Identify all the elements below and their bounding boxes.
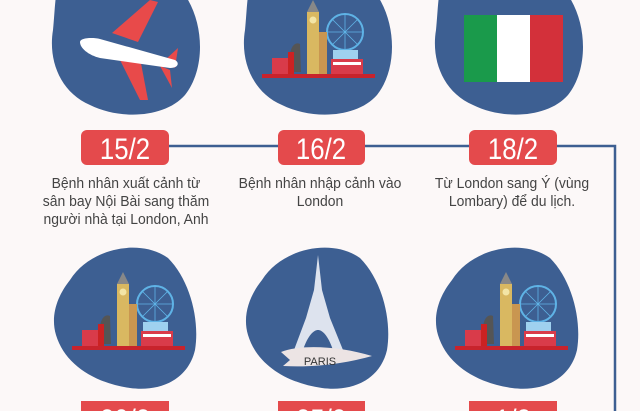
step 4: [54, 248, 196, 411]
date box: step 5: [278, 401, 365, 411]
date box: 18/2: [469, 130, 557, 165]
text: step 1: người nhà tại London, Anh: [44, 212, 208, 228]
text: step 3: Từ London sang Ý (vùng: [435, 175, 589, 192]
text: step 2: London: [297, 194, 343, 210]
icon: italy flag: [464, 15, 563, 82]
date box: 15/2: 15/2: [100, 132, 150, 165]
step 1: 15/2: [43, 0, 209, 228]
icon: eiffel tower: PARIS: [304, 356, 336, 368]
text: step 3: Lombary) để du lịch.: [449, 194, 575, 210]
date box: step 6: [469, 401, 557, 411]
date box: 16/2: [278, 130, 365, 165]
step 2: 16/2: [239, 0, 401, 210]
blob: step 3: [435, 0, 583, 115]
icon: eiffel tower: [281, 255, 372, 368]
date box: step 4: [81, 401, 169, 411]
text: step 1: sân bay Nội Bài sang thăm: [43, 194, 209, 210]
icon: airplane: [80, 0, 178, 100]
date box: 18/2: 18/2: [488, 132, 538, 165]
blob: step 6: [436, 248, 578, 389]
text: step 1: Bệnh nhân xuất cảnh từ: [52, 176, 201, 192]
step 5: paris: [246, 248, 388, 411]
blob: step 2: [244, 0, 392, 115]
date box: 15/2: [81, 130, 169, 165]
date box: 16/2: 16/2: [296, 132, 346, 165]
timeline connector line: [169, 146, 615, 411]
text: step 2: Bệnh nhân nhập cảnh vào: [239, 176, 401, 192]
step 3: 18/2: [435, 0, 589, 210]
blob: step 4: [54, 248, 196, 389]
blob: step 1: [52, 0, 200, 115]
step 6: [436, 248, 578, 411]
blob: step 5: [246, 248, 388, 389]
icon: london skyline: [455, 272, 568, 350]
icon: london skyline: [262, 0, 375, 78]
icon: london skyline: [72, 272, 185, 350]
